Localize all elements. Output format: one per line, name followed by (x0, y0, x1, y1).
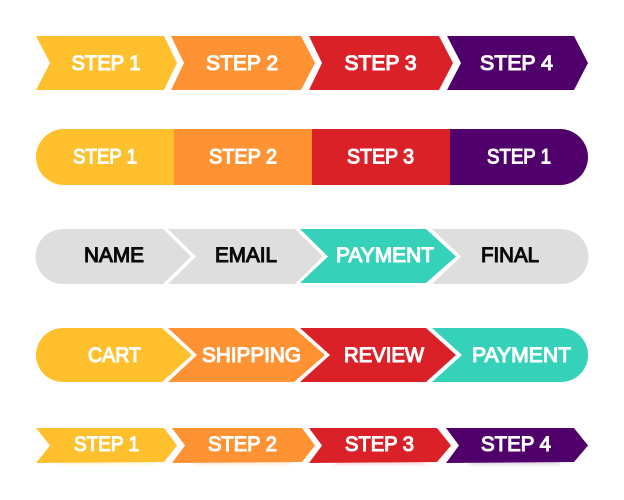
step 2 segment (174, 129, 312, 185)
step 3 slim chevron (309, 428, 451, 464)
step 4 slim chevron (446, 428, 588, 464)
row 1: chevron steps (36, 36, 588, 90)
cart step (36, 328, 192, 382)
step 2 chevron: STEP 2 (206, 52, 278, 75)
step 1 chevron (36, 36, 177, 90)
step 1 end segment (450, 129, 588, 185)
row 4: checkout steps (36, 328, 588, 382)
payment step: PAYMENT (336, 244, 434, 267)
row 5: slim chevron steps (36, 428, 588, 464)
step 1 slim chevron (36, 428, 177, 464)
final step (432, 229, 588, 284)
step 2 chevron (171, 36, 315, 90)
step 3 chevron: STEP 3 (344, 52, 416, 75)
row 3: form steps with highlighted payment (36, 229, 588, 284)
name step (36, 229, 191, 284)
name step: NAME (84, 244, 144, 267)
shipping step (168, 328, 325, 382)
step 1 chevron: STEP 1 (72, 52, 140, 75)
shipping step: SHIPPING (202, 344, 301, 367)
step 4 chevron: STEP 4 (480, 52, 553, 75)
step 2 segment: STEP 2 (209, 146, 277, 168)
step 2 slim chevron: STEP 2 (208, 433, 277, 456)
step 1 segment: STEP 1 (73, 146, 137, 168)
step 3 slim chevron: STEP 3 (345, 433, 414, 456)
step 1 segment (36, 129, 174, 185)
email step: EMAIL (215, 244, 277, 267)
step 1 end segment: STEP 1 (487, 146, 551, 168)
step 1 slim chevron: STEP 1 (74, 433, 139, 456)
step 3 chevron (309, 36, 453, 90)
payment step (300, 229, 456, 283)
payment step: PAYMENT (472, 344, 571, 367)
final step: FINAL (481, 244, 539, 267)
step 4 chevron (447, 36, 588, 90)
step 2 slim chevron (172, 428, 315, 464)
cart step: CART (88, 344, 141, 367)
review step (300, 328, 456, 382)
step 3 segment (312, 129, 450, 185)
step 4 slim chevron: STEP 4 (481, 433, 551, 456)
row 2: rounded segmented bar (36, 129, 588, 185)
payment step (432, 328, 588, 382)
review step: REVIEW (344, 344, 424, 367)
email step (168, 229, 323, 284)
step 3 segment: STEP 3 (347, 146, 414, 168)
